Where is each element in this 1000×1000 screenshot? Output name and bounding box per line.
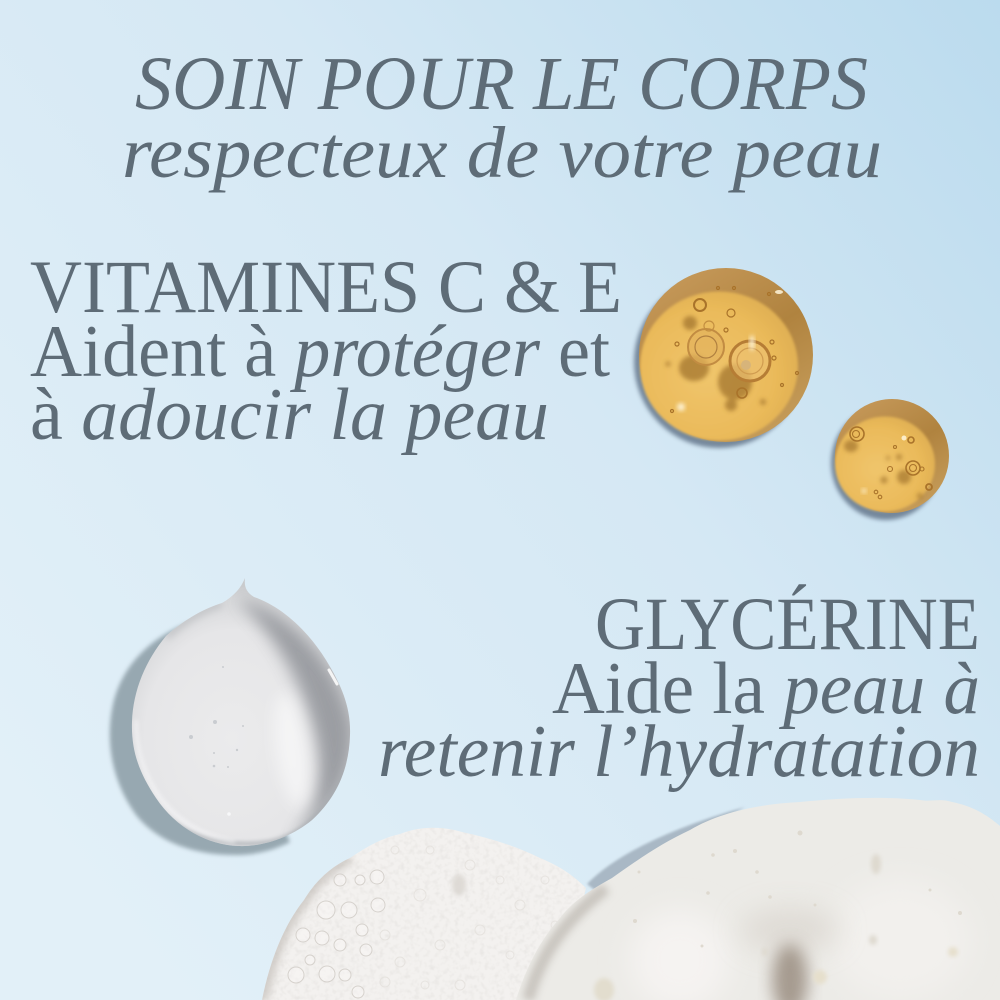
- title: SOIN POUR LE CORPS: [135, 42, 868, 126]
- title: [122, 42, 882, 193]
- text block: vitamines: [30, 246, 622, 456]
- text block: vitamines: à adoucir la peau: [30, 374, 549, 456]
- foam pores: [594, 830, 962, 1000]
- gel shadow: [110, 622, 290, 855]
- text block: glycerine: retenir l’hydratation: [378, 711, 980, 793]
- gel shading: [136, 598, 353, 844]
- grey shadow behind foam: [587, 807, 745, 892]
- bubble shadows: [666, 316, 766, 411]
- gel specks: [189, 666, 244, 816]
- foam dimple: [452, 874, 466, 896]
- title: respecteux de votre peau: [122, 112, 882, 193]
- text block: glycerine: GLYCÉRINE: [595, 583, 980, 666]
- text block: vitamines: Aident à protéger et: [30, 311, 610, 393]
- foam bubbles: [288, 870, 385, 998]
- highlights: [677, 290, 783, 411]
- small amber drop: [831, 399, 949, 520]
- highlights: [862, 436, 906, 494]
- text block: vitamines: VITAMINES C & E: [30, 246, 622, 329]
- right foam: [516, 798, 1000, 1000]
- left foam: [260, 820, 590, 1000]
- bubble shadows: [844, 440, 923, 499]
- central hollow: [740, 908, 840, 952]
- text block: glycerine: Aide la peau à: [552, 648, 980, 730]
- gel body: [132, 578, 350, 846]
- left edge shading: [528, 888, 606, 1000]
- soft lights: [646, 926, 714, 994]
- bubbles: [850, 427, 932, 499]
- clear gel drop: [110, 578, 353, 855]
- text block: glycerine: [378, 583, 980, 793]
- bubbles: [670, 286, 798, 412]
- large amber drop: [634, 268, 813, 448]
